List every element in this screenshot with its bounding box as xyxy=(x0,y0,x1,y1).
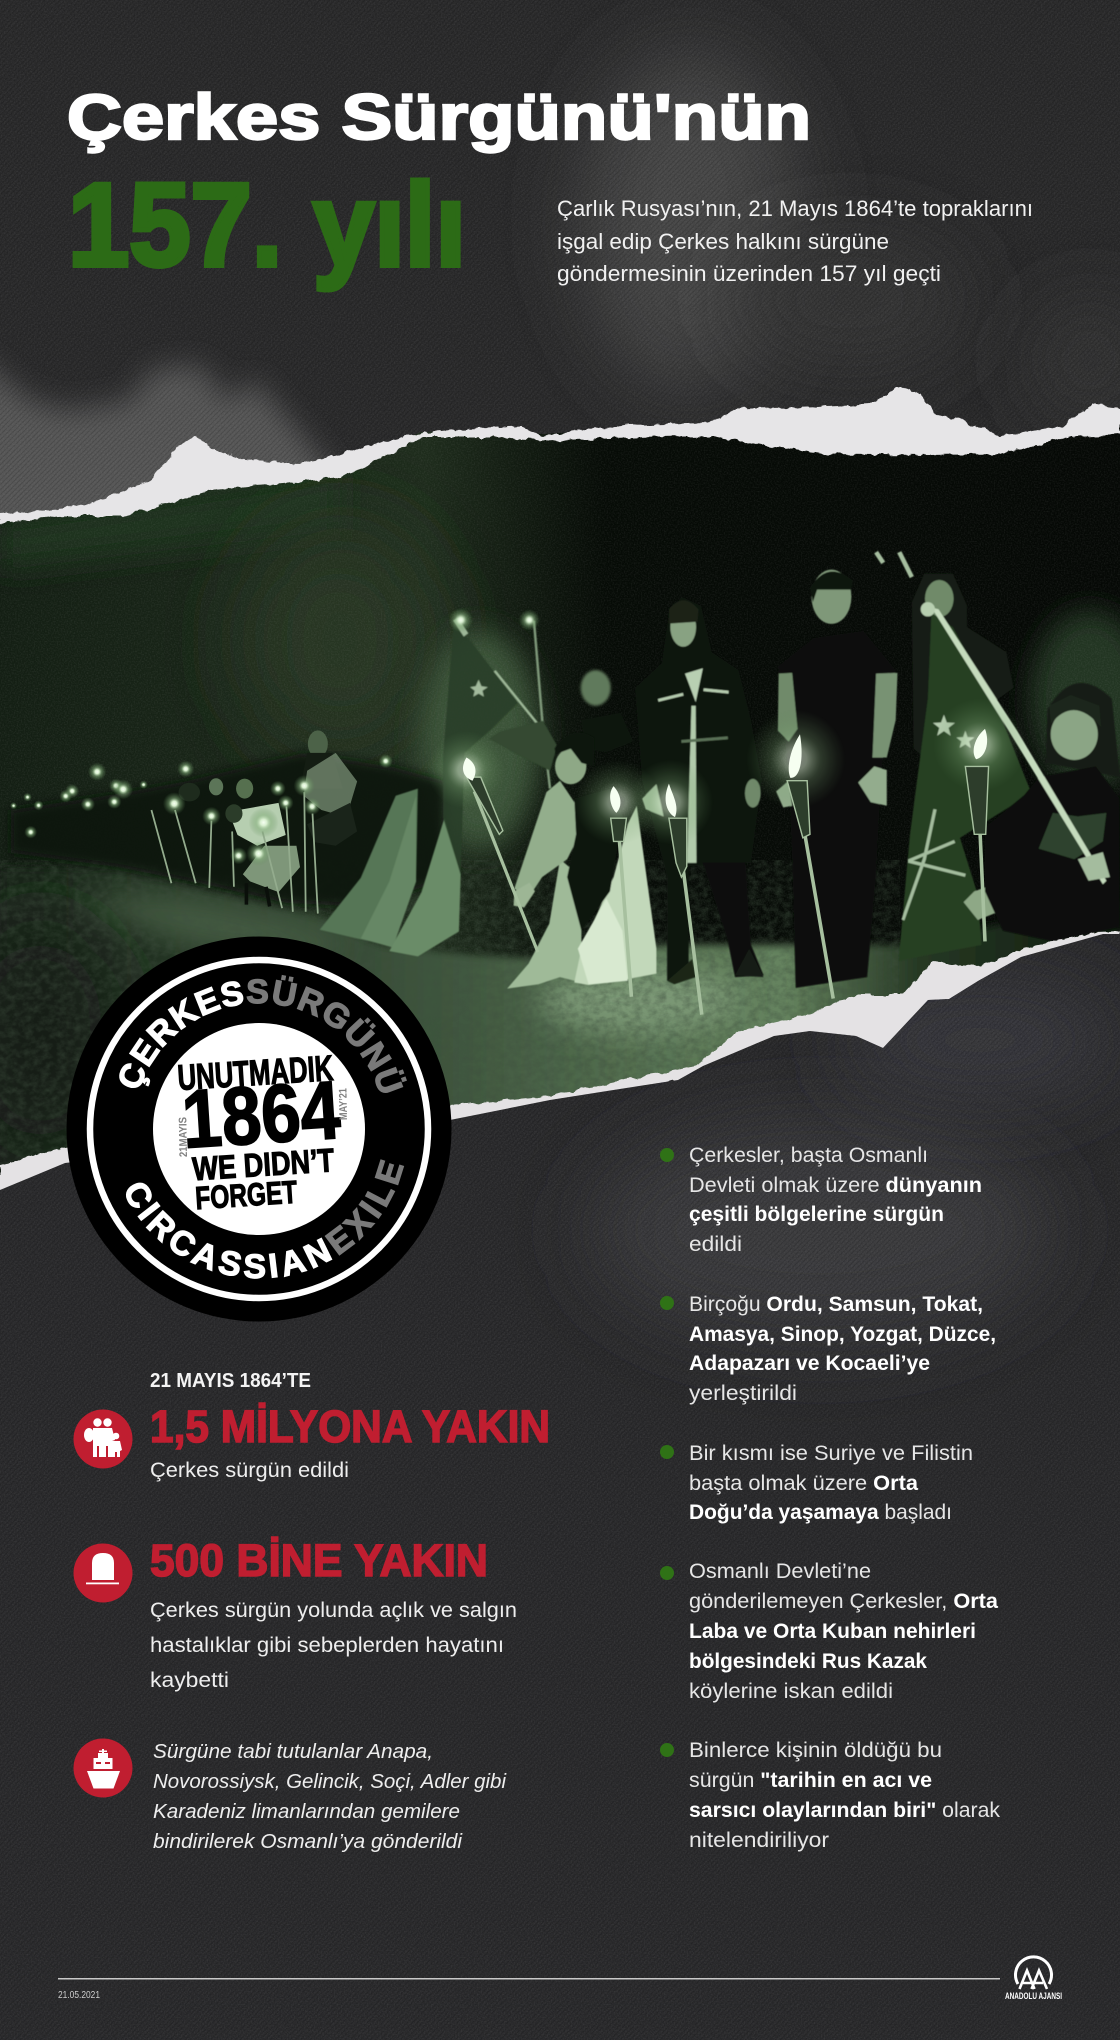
icon: family xyxy=(74,1410,132,1468)
bullet list item 3 xyxy=(660,1442,973,1524)
note: ports xyxy=(153,1740,507,1853)
photo: torch-lit commemoration at night, green duotone xyxy=(0,400,1120,1200)
lower dark paper with torn white edge xyxy=(0,900,1120,2040)
bullet list item 4: gönderilemeyen Çerkesler, Orta xyxy=(689,1590,998,1613)
badge: Circassian Exile 1864: ÇERKESSÜRGÜNÜ xyxy=(119,974,407,1093)
date heading: 21 MAYIS 1864’TE xyxy=(150,1370,311,1392)
title year: 157. yılı xyxy=(68,160,466,292)
note: ports: bindirilerek Osmanlı’ya gönderildi xyxy=(153,1830,463,1853)
badge: Circassian Exile 1864: 21MAYIS xyxy=(177,1117,190,1157)
ground: sandy mound xyxy=(0,860,1120,1200)
bullet list item 5: sarsıcı olaylarından biri" olarak xyxy=(689,1799,1001,1822)
footer rule and date: 21.05.2021 xyxy=(58,1989,100,2001)
bullet list item 3: Bir kısmı ise Suriye ve Filistin xyxy=(689,1442,973,1465)
stat: 1.5 million: 1,5 MİLYONA YAKIN xyxy=(150,1401,550,1452)
stat: 500 thousand: Çerkes sürgün yolunda açlık ve salgın xyxy=(150,1599,517,1622)
badge: Circassian Exile 1864 xyxy=(66,936,452,1322)
title: Çerkes Sürgünü'nün xyxy=(67,81,811,153)
bullet list item 2: yerleştirildi xyxy=(689,1382,797,1405)
bullet list item 3: başta olmak üzere Orta xyxy=(689,1472,918,1495)
bullet list item 1: Çerkesler, başta Osmanlı xyxy=(689,1144,928,1167)
logo: Anadolu Ajansi xyxy=(1005,1957,1062,2001)
badge: Circassian Exile 1864: CIRCASSIANEXILE xyxy=(126,1159,404,1279)
intro text: göndermesinin üzerinden 157 yıl geçti xyxy=(557,261,941,286)
bullet list item 5: nitelendiriliyor xyxy=(689,1829,829,1852)
stat: 500 thousand: hastalıklar gibi sebeplerden hayatını xyxy=(150,1634,504,1657)
stat: 500 thousand: 500 BİNE YAKIN xyxy=(150,1535,488,1586)
logo: Anadolu Ajansi: ANADOLU AJANSI xyxy=(1005,1991,1062,2001)
bullet list item 2: Adapazarı ve Kocaeli’ye xyxy=(689,1352,930,1375)
bullet list item 1: edildi xyxy=(689,1233,742,1256)
icon: ship xyxy=(74,1738,132,1798)
bullet list item 3: Doğu’da yaşamaya başladı xyxy=(689,1501,952,1524)
background: dark textured paper with smoke xyxy=(0,0,1120,560)
bullet list item 1: Devleti olmak üzere dünyanın xyxy=(689,1174,982,1197)
large torches with flames xyxy=(427,699,1026,1015)
bullet list item 2 xyxy=(660,1293,996,1405)
stat: 1.5 million xyxy=(150,1401,550,1482)
bullet list item 1: çeşitli bölgelerine sürgün xyxy=(689,1203,944,1226)
intro text xyxy=(557,196,1033,286)
badge: Circassian Exile 1864: MAY’21 xyxy=(337,1088,350,1120)
bullet list item 1 xyxy=(660,1144,982,1256)
bullet list item 4 xyxy=(660,1560,998,1703)
icon: gravestone xyxy=(74,1544,132,1602)
intro text: Çarlık Rusyası’nın, 21 Mayıs 1864’te topraklarını xyxy=(557,196,1033,221)
bullet list item 2: Birçoğu Ordu, Samsun, Tokat, xyxy=(689,1293,983,1316)
bullet list item 5: Binlerce kişinin öldüğü bu xyxy=(689,1739,942,1762)
badge: Circassian Exile 1864: 1864 xyxy=(179,1065,343,1166)
bullet list item 4: Osmanlı Devleti’ne xyxy=(689,1560,871,1583)
boy in jacket and bright drape xyxy=(507,733,656,989)
note: ports: Karadeniz limanlarından gemilere xyxy=(153,1800,460,1823)
note: ports: Novorossiysk, Gelincik, Soçi, Adler gibi xyxy=(153,1770,507,1793)
intro text: işgal edip Çerkes halkını sürgüne xyxy=(557,229,889,254)
bullet list item 4: köylerine iskan edildi xyxy=(689,1680,893,1703)
bullet list item 5 xyxy=(660,1739,1001,1852)
bullet list item 2: Amasya, Sinop, Yozgat, Düzce, xyxy=(689,1323,996,1346)
stat: 1.5 million: Çerkes sürgün edildi xyxy=(150,1459,349,1482)
standing people and central flag xyxy=(581,552,1120,988)
bullet list item 4: Laba ve Orta Kuban nehirleri xyxy=(689,1620,976,1643)
bullet list item 5: sürgün "tarihin en acı ve xyxy=(689,1769,932,1792)
stat: 500 thousand: kaybetti xyxy=(150,1669,229,1692)
left crowd with small torches xyxy=(10,730,446,914)
badge: Circassian Exile 1864: WE DIDN’T xyxy=(191,1141,335,1187)
badge: Circassian Exile 1864: UNUTMADIK xyxy=(176,1047,335,1098)
stat: 500 thousand xyxy=(150,1535,517,1692)
note: ports: Sürgüne tabi tutulanlar Anapa, xyxy=(153,1740,433,1763)
badge: Circassian Exile 1864: FORGET xyxy=(194,1174,299,1216)
flag drapes on the sand xyxy=(320,608,557,956)
bullet list item 4: bölgesindeki Rus Kazak xyxy=(689,1650,927,1673)
torn white paper strip: top edge of photo xyxy=(0,386,1120,523)
